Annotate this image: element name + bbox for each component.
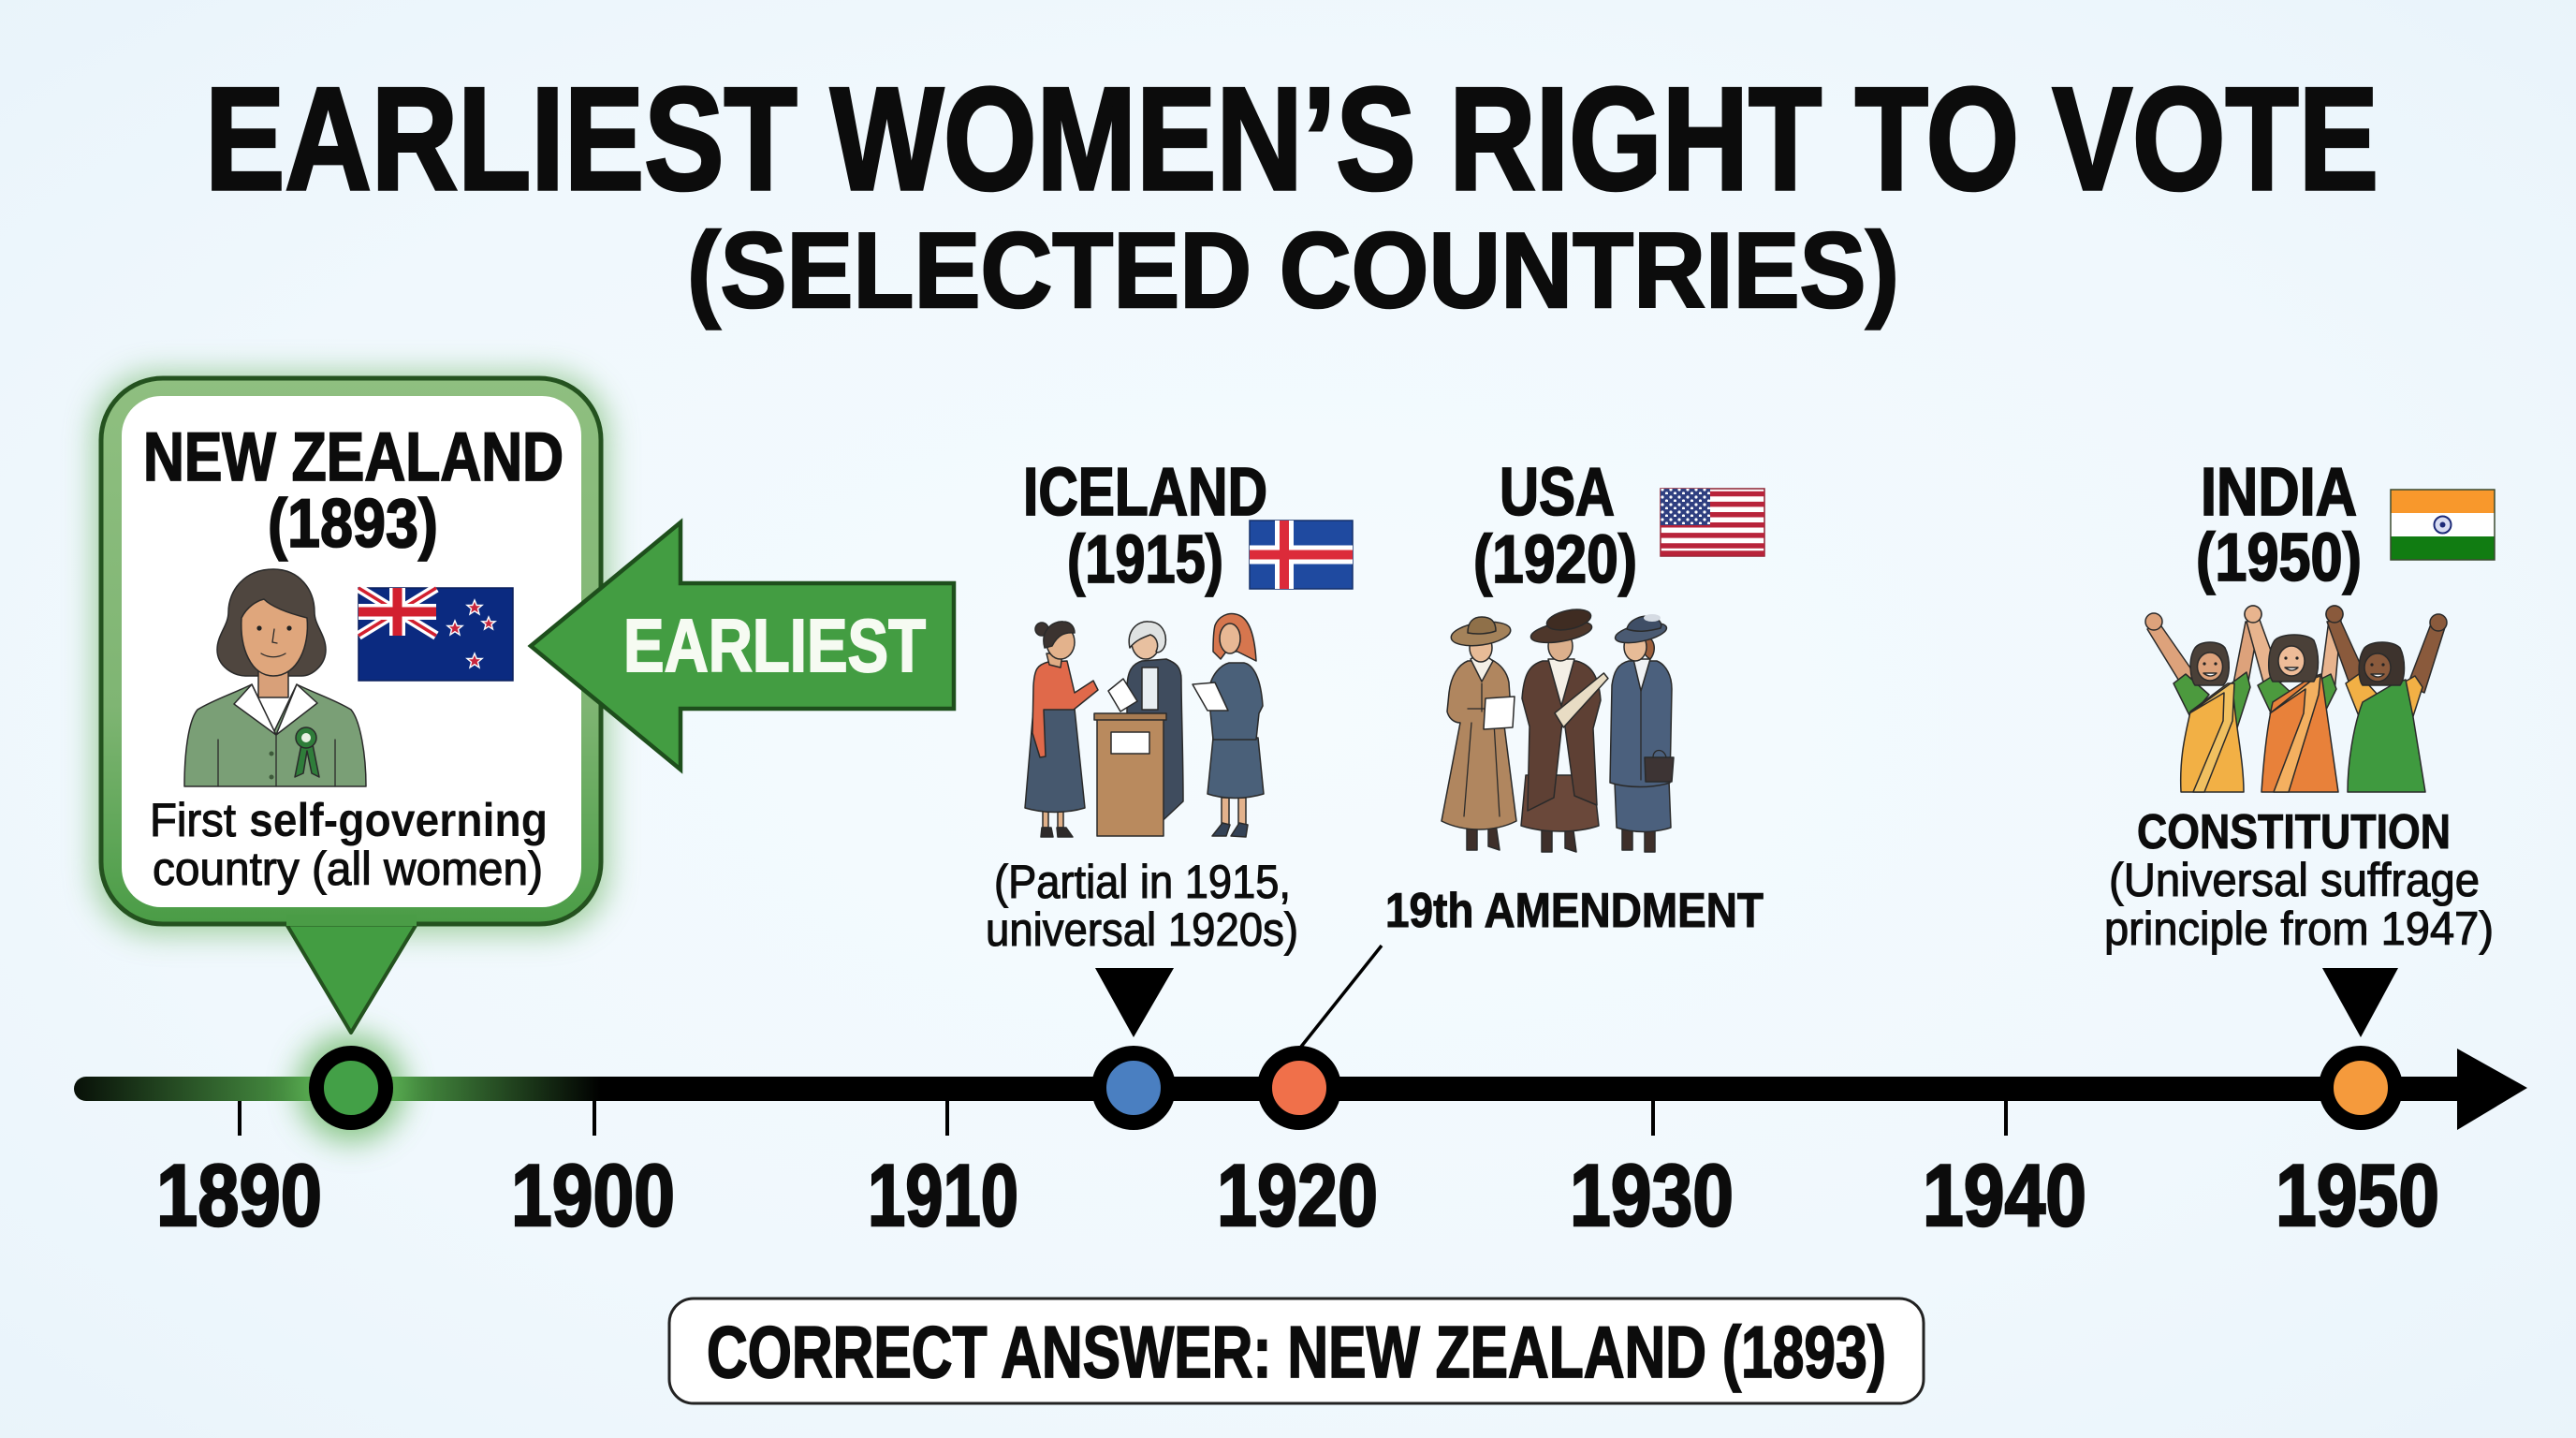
icon: Iceland flag: [1250, 521, 1353, 589]
panel: Iceland: [986, 455, 1353, 956]
answer text: CORRECT ANSWER: NEW ZEALAND (1893): [707, 1311, 1886, 1393]
illustration: women voting at ballot box: [1025, 614, 1264, 837]
year label 1890: 1890: [156, 1146, 322, 1244]
panel: New Zealand callout: [101, 378, 601, 1033]
timeline arrowhead: [2457, 1049, 2527, 1130]
year: 1915: (1915): [1067, 522, 1223, 597]
arrow: earliest: [531, 522, 954, 770]
woman in dark brown coat: [1521, 606, 1612, 852]
caption: country (all women): country (all women): [153, 843, 543, 895]
marker 1920: [1265, 1053, 1334, 1123]
note: universal 1920s: universal 1920s): [986, 903, 1298, 956]
panel: USA: [1385, 455, 1764, 938]
pointer 1950: [2322, 968, 2398, 1037]
note: principle from 1947: principle from 1947): [2104, 902, 2494, 955]
heading: New Zealand: NEW ZEALAND: [143, 419, 564, 495]
tick 1900: [593, 1101, 596, 1136]
icon: New Zealand flag: [359, 588, 513, 681]
icon: woman with green jacket: [184, 569, 366, 786]
heading: India: INDIA: [2201, 455, 2357, 530]
woman with red hair: [1193, 614, 1264, 837]
woman with orange blouse: [1025, 622, 1098, 837]
timeline axis: [74, 1077, 2470, 1101]
year label 1940: 1940: [1923, 1146, 2086, 1244]
tick 1890: [238, 1101, 242, 1136]
year label 1910: 1910: [868, 1146, 1018, 1244]
note: partial in 1915: (Partial in 1915,: [994, 856, 1291, 908]
marker 1893 glow: [297, 1034, 405, 1142]
year label 1920: 1920: [1217, 1146, 1378, 1244]
arrow shape: [531, 522, 954, 770]
heading: USA: USA: [1500, 455, 1615, 530]
timeline: [74, 1049, 2527, 1244]
marker 1893: [316, 1053, 386, 1123]
marker 1950: [2326, 1053, 2395, 1123]
callout frame: [101, 378, 601, 924]
woman in tan dress: [1442, 617, 1516, 850]
woman in dark jacket with white hair: [1127, 622, 1183, 829]
panel: India: [2104, 455, 2495, 955]
pointer 1915: [1095, 968, 1174, 1037]
tick 1910: [945, 1101, 949, 1136]
illustration: women celebrating in saris: [2145, 606, 2447, 792]
caption: first self-governing: First: [150, 794, 236, 846]
pointer join: [286, 915, 417, 926]
woman in green sari: [2326, 606, 2447, 792]
answer box frame: [669, 1299, 1924, 1403]
callout pointer: [281, 915, 422, 1033]
label: 19th Amendment: 19th AMENDMENT: [1385, 884, 1764, 938]
icon: USA flag: [1661, 489, 1764, 556]
year: 1920: (1920): [1473, 522, 1637, 597]
note: universal suffrage: (Universal suffrage: [2109, 854, 2480, 906]
icon: India flag: [2391, 490, 2495, 560]
woman in blue coat with handbag: [1610, 614, 1674, 852]
woman in gold sari: [2145, 606, 2261, 792]
year label 1950: 1950: [2276, 1146, 2439, 1244]
year: 1893: (1893): [268, 486, 438, 562]
podium: [1094, 713, 1166, 836]
year label 1930: 1930: [1570, 1146, 1734, 1244]
ballot paper: [1108, 679, 1137, 712]
callout inner panel: [122, 396, 581, 907]
illustration: suffragists in period dress: [1442, 606, 1674, 852]
marker 1915: [1099, 1053, 1168, 1123]
woman in orange sari: [2245, 606, 2343, 792]
tick 1940: [2004, 1101, 2008, 1136]
arrow label: EARLIEST: [623, 604, 926, 687]
tick 1930: [1651, 1101, 1655, 1136]
callout glow: [94, 373, 608, 934]
subtitle: (SELECTED COUNTRIES): [687, 212, 1899, 330]
year: 1950: (1950): [2196, 521, 2362, 595]
year label 1900: 1900: [511, 1146, 675, 1244]
leader line to USA: [1301, 946, 1382, 1047]
answer box: [669, 1299, 1924, 1403]
heading: Iceland: ICELAND: [1023, 455, 1267, 530]
label: Constitution: CONSTITUTION: [2137, 805, 2451, 859]
caption: first self-governing: self-governing: [249, 794, 548, 846]
